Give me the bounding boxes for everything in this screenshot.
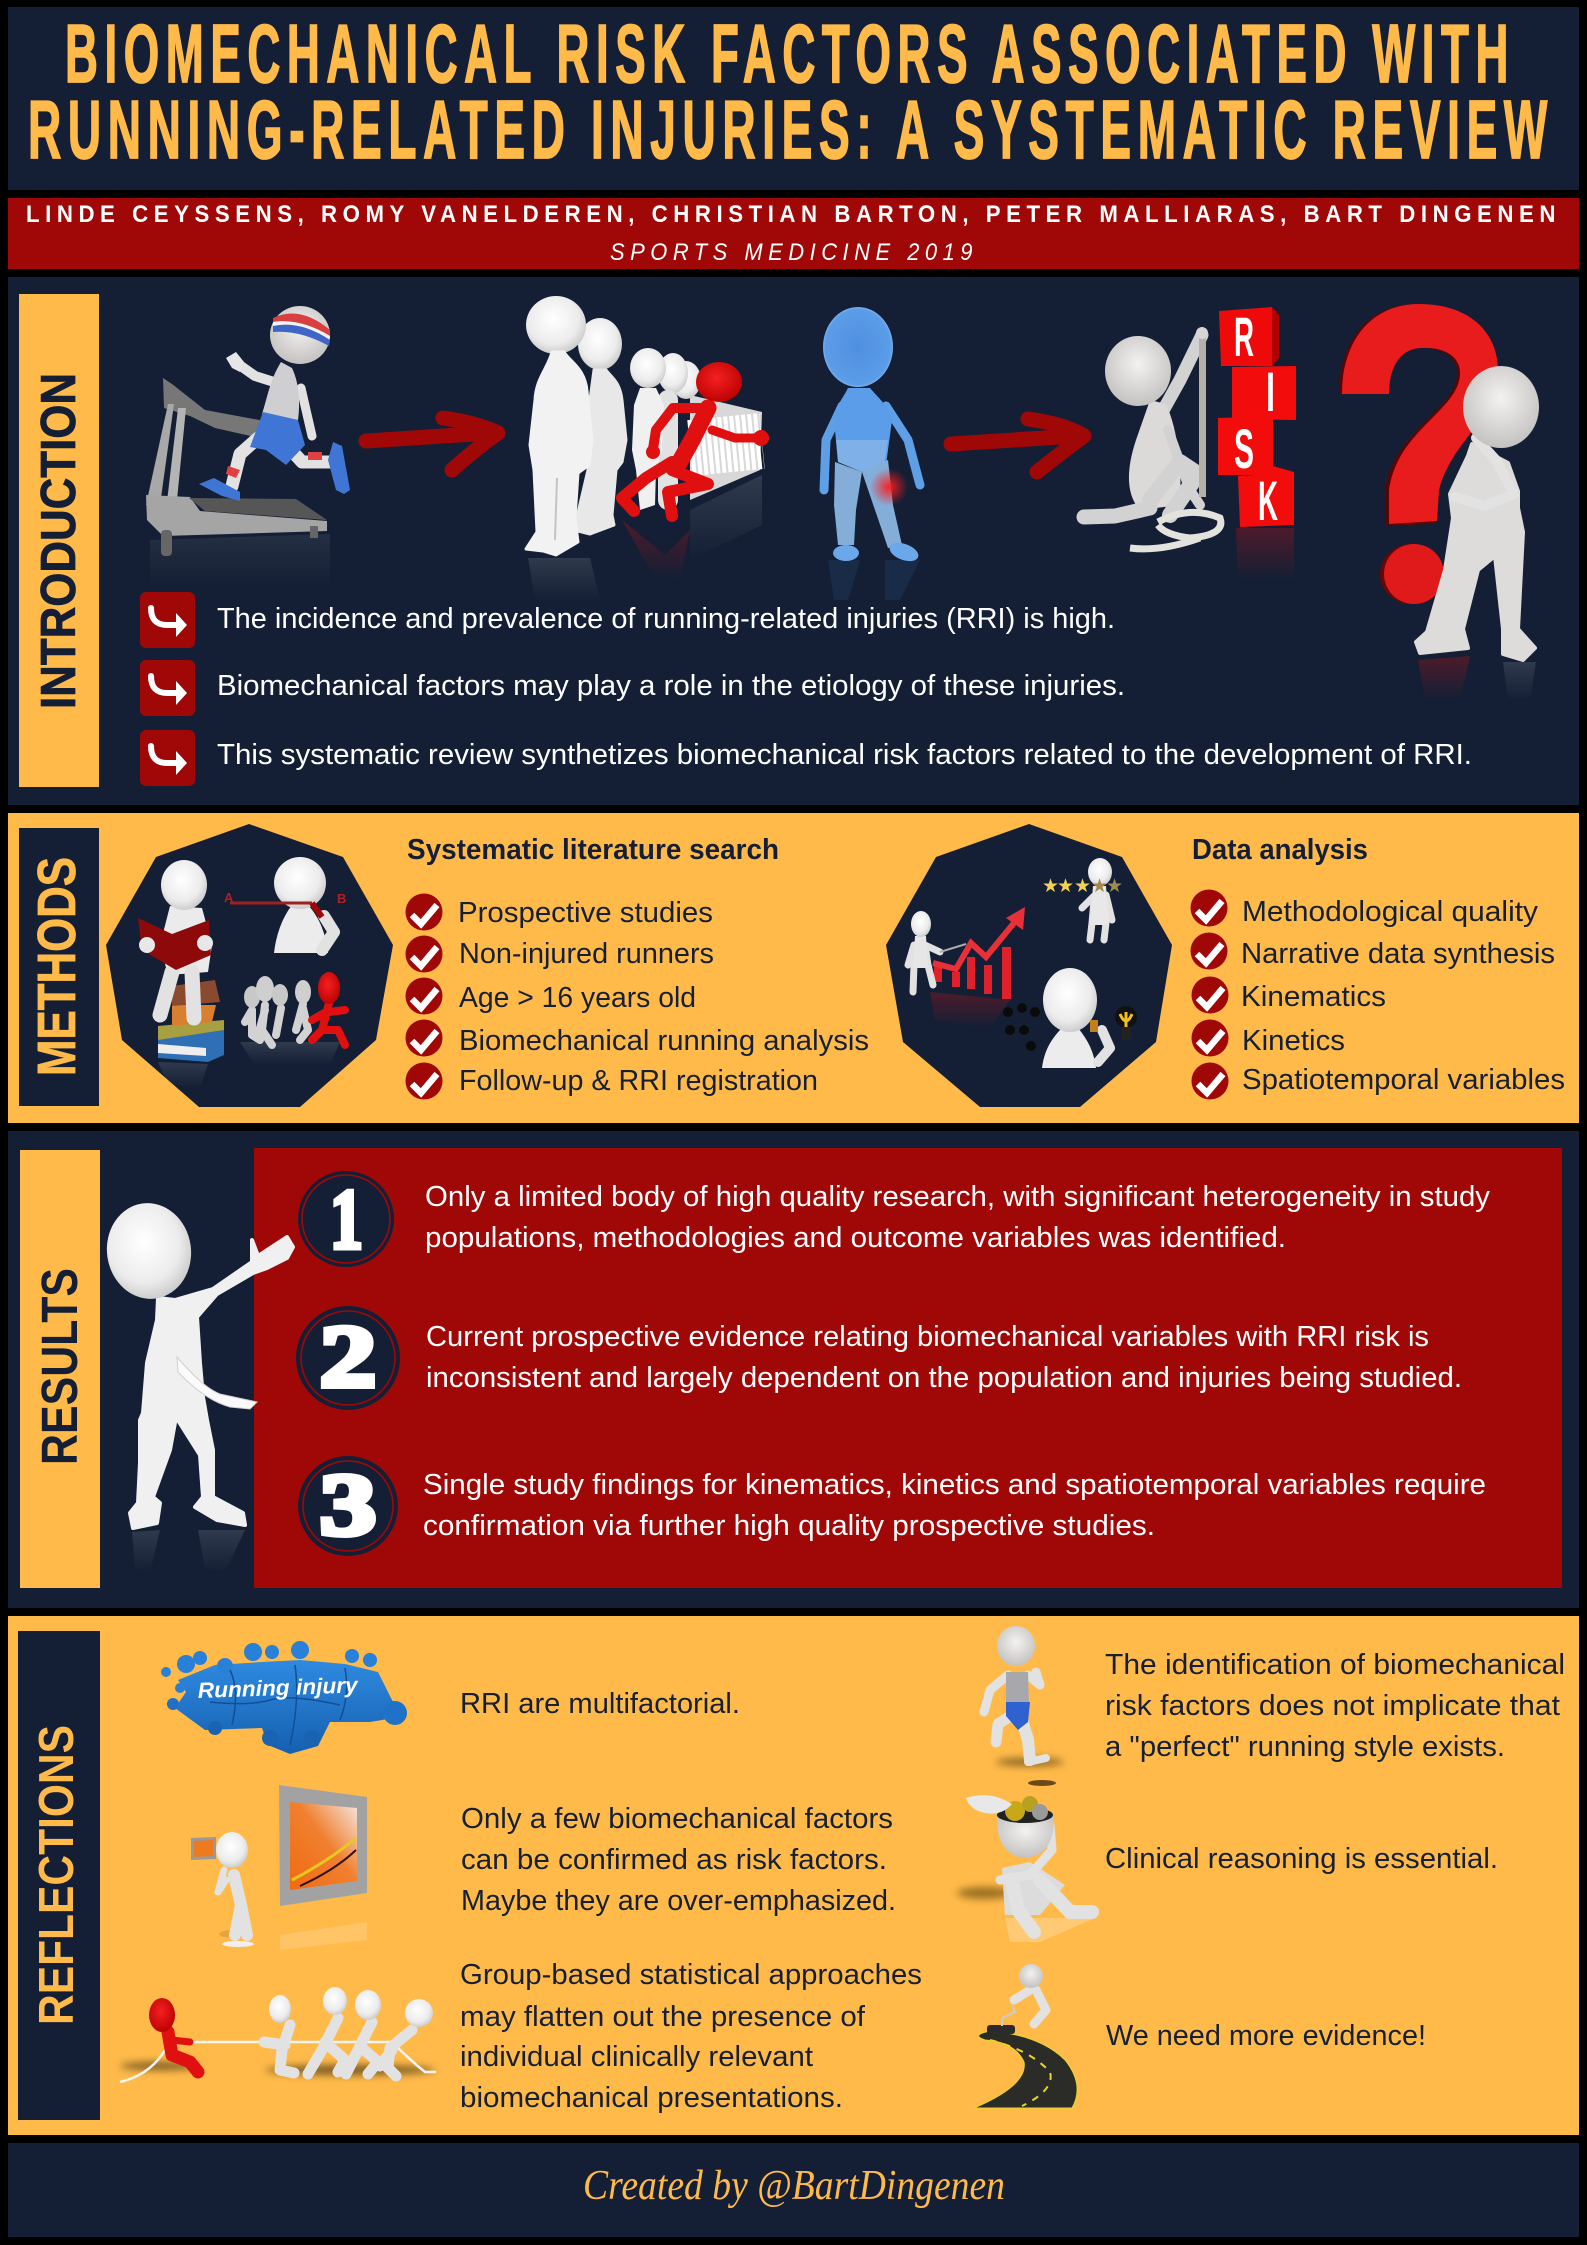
introduction label [19,294,99,787]
badge 3: 3 [320,1457,376,1554]
icon: figure rolling out road [974,1964,1077,2108]
checklist: literature search: Prospective studies [458,897,713,929]
authors band [8,198,1579,269]
icon: presenting figure [101,1198,293,1572]
heading: data analysis: Data analysis [1192,834,1368,866]
panel: introduction [8,277,1579,805]
icon: thinking figure with question mark [1339,304,1539,700]
result 3 [298,1456,1486,1556]
icon: running injury puzzle: Running injury [197,1672,360,1703]
bullet: biomechanical factors: Biomechanical factors may play a role in the etiology of these injuries. [217,670,1125,702]
text 1: Only a limited body of high quality research, with significant heterogeneity in study [425,1181,1491,1213]
badge 2 [296,1306,400,1410]
checklist: literature search: Age > 16 years old [459,982,696,1014]
bullet: systematic review: This systematic review synthetizes biomechanical risk factors related to the development of RRI. [217,739,1472,771]
text: group-based statistics: may flatten out the presence of [460,2001,866,2033]
bullet: biomechanical factors [140,660,1125,716]
text: group-based statistics [460,1959,922,2114]
icon: running injury puzzle [161,1641,407,1754]
result 2 [296,1306,1462,1410]
figure with star rating: ★ [1042,876,1059,897]
text: clinical reasoning: Clinical reasoning is essential. [1105,1843,1498,1875]
text 3: confirmation via further high quality prospective studies. [423,1510,1155,1542]
icon: blue anatomy figure with knee pain [823,307,921,600]
bullet: systematic review [140,730,1472,786]
reflections label [18,1631,100,2120]
text 3: Single study findings for kinematics, kinetics and spatiotemporal variables require [423,1469,1486,1501]
text: group-based statistics: biomechanical presentations. [460,2082,843,2114]
bust with A to B line [274,905,328,953]
text: few factors confirmed: Maybe they are over-emphasized. [461,1885,896,1917]
text 2 [426,1321,1462,1394]
checklist: data analysis [1190,890,1565,1100]
text: perfect running style [1105,1649,1565,1763]
reflections label: REFLECTIONS [30,1725,84,2025]
icon: row of runners with red runner [526,296,769,600]
stack of books [158,980,224,1088]
panel: reflections [8,1616,1579,2135]
text: multifactorial: RRI are multifactorial. [460,1688,740,1720]
text 1: populations, methodologies and outcome variables was identified. [425,1222,1286,1254]
title panel [8,7,1579,190]
checklist: data analysis: Narrative data synthesis [1241,938,1555,970]
results label [20,1150,100,1588]
icon: literature search decagon: A [224,890,234,905]
methods label [19,828,99,1106]
checklist: literature search [406,894,869,1100]
text: few factors confirmed: can be confirmed as risk factors. [461,1844,887,1876]
badge 3 [298,1456,398,1556]
badge 2: 2 [320,1309,376,1406]
heading: literature search: Systematic literature search [407,834,779,866]
bullet: incidence and prevalence [140,592,1115,648]
bullet arrow icon [140,730,195,786]
introduction label: INTRODUCTION [32,373,86,709]
checklist: data analysis: Spatiotemporal variables [1242,1064,1565,1096]
panel: methods [8,813,1579,1123]
text 1 [425,1181,1491,1254]
panel: results [8,1131,1579,1608]
icon: figure with open head and gears [957,1795,1095,1942]
group of runners [240,972,345,1065]
text: group-based statistics: individual clinically relevant [460,2041,813,2073]
figure with star rating: ★ [1057,876,1074,897]
icon: figure viewing framed picture [191,1785,367,1950]
results red block [254,1148,1562,1588]
text: perfect running style: a "perfect" running style exists. [1105,1731,1505,1763]
figure with star rating: ★ [1091,876,1108,897]
figure with star rating: ★ [1074,876,1091,897]
footer panel [8,2143,1579,2237]
checklist: literature search: Follow-up & RRI registration [459,1065,818,1097]
bullet arrow icon [140,592,195,648]
text: perfect running style: The identification of biomechanical [1105,1649,1565,1681]
icon: kneeling figure with measuring tape and RISK cubes: R [1234,305,1254,368]
text 2: inconsistent and largely dependent on the population and injuries being studied. [426,1362,1462,1394]
checklist: literature search: Biomechanical running analysis [459,1025,869,1057]
checklist: literature search: Non-injured runners [459,938,714,970]
checklist: data analysis: Kinematics [1241,981,1386,1013]
figure with rising chart [908,907,1025,1028]
icon: kneeling figure with measuring tape and RISK cubes: I [1266,360,1275,423]
icon: literature search decagon: B [337,891,346,906]
text: few factors confirmed: Only a few biomechanical factors [461,1803,893,1835]
icon: kneeling figure with measuring tape and RISK cubes [1084,305,1296,580]
checklist: data analysis: Methodological quality [1242,896,1539,928]
text: few factors confirmed [461,1803,896,1917]
icon: kneeling figure with measuring tape and RISK cubes: S [1234,417,1254,480]
checklist: data analysis: Kinetics [1242,1025,1345,1057]
icon: runner on treadmill [146,306,350,585]
badge 1 [298,1171,394,1267]
journal: SPORTS MEDICINE 2019 [610,239,978,266]
results label: RESULTS [31,1268,88,1465]
text: group-based statistics: Group-based statistical approaches [460,1959,922,1991]
icon: data analysis decagon [886,824,1172,1107]
figure with star rating [1042,858,1123,940]
result 1 [298,1171,1491,1267]
text: perfect running style: risk factors does not implicate that [1105,1690,1560,1722]
icon: tug of war [120,1987,436,2082]
text 3 [423,1469,1486,1542]
arrow: treadmill to runners [366,418,498,470]
text 2: Current prospective evidence relating biomechanical variables with RRI risk is [426,1321,1429,1353]
bullet: incidence and prevalence: The incidence and prevalence of running-related injuries (RRI) is high. [217,603,1115,635]
title [28,7,1554,176]
footer credit: Created by @BartDingenen [583,2163,1005,2209]
icon: literature search decagon [106,824,393,1107]
arrow: injury to risk [951,419,1084,472]
bust with idea bulb [1003,968,1137,1068]
bullet arrow icon [140,660,195,716]
text: more evidence: We need more evidence! [1106,2020,1426,2052]
badge 1: 1 [330,1171,363,1267]
methods label: METHODS [27,857,87,1076]
figure with star rating: ★ [1106,876,1123,897]
icon: kneeling figure with measuring tape and RISK cubes: K [1258,469,1278,532]
icon: runner in blue shorts [984,1626,1064,1786]
